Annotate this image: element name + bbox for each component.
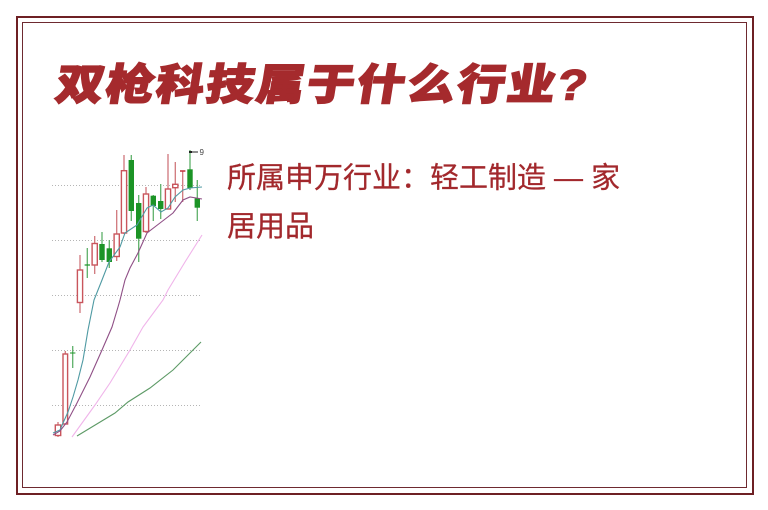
title: 双枪科技属于什么行业?: [53, 61, 591, 109]
body text: [227, 162, 620, 243]
moving average lines: [53, 187, 202, 437]
rising candles: [55, 154, 185, 437]
falling candles: [70, 150, 200, 368]
max price tag: 9: [200, 148, 204, 157]
body text: 所属申万行业：轻工制造 — 家: [227, 162, 620, 194]
candlestick chart: [52, 148, 204, 437]
body text: 居用品: [227, 211, 314, 243]
max price tag: [189, 148, 204, 157]
